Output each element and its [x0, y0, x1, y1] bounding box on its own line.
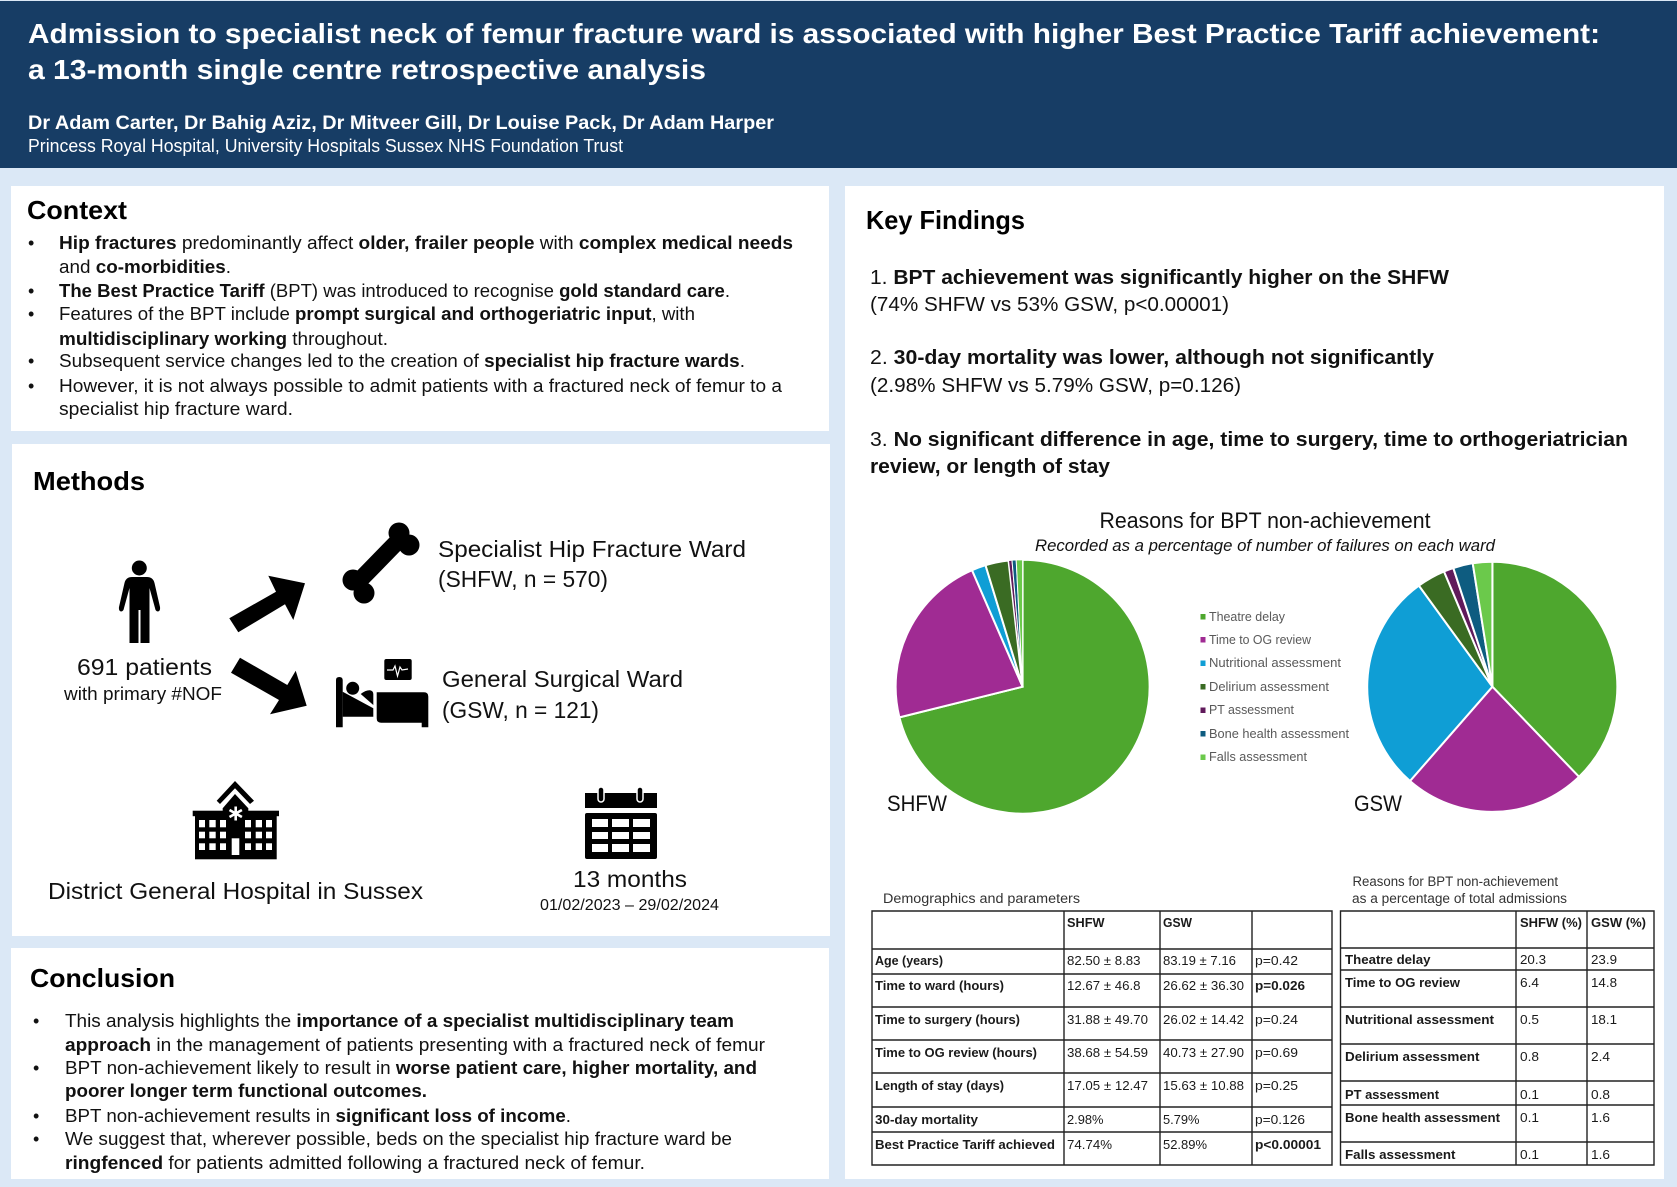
- finding 3: [870, 429, 1628, 478]
- table caption: demographics: Demographics and parameters: [883, 891, 1080, 906]
- context bullet list: However, it is not always possible to admit patients with a fractured neck of femur to a: [59, 376, 783, 396]
- table: demographics and parameters: 17.05 ± 12.47: [1067, 1078, 1148, 1093]
- table: demographics and parameters: p=0.126: [1255, 1112, 1305, 1127]
- text: patient count: 691 patients: [77, 654, 212, 680]
- table: reasons as percentage of admissions: 14.8: [1591, 975, 1617, 990]
- table: demographics and parameters: 52.89%: [1163, 1137, 1207, 1152]
- table: reasons as percentage of admissions: 18.1: [1591, 1012, 1617, 1027]
- conclusion bullet list: BPT non-achievement results in significant loss of income .: [65, 1106, 571, 1126]
- chart title: [1035, 508, 1496, 555]
- table: demographics and parameters: 30-day mortality: [875, 1112, 979, 1127]
- conclusion bullet list: •: [33, 1129, 39, 1149]
- table caption: reasons: as a percentage of total admissions: [1352, 891, 1567, 906]
- conclusion bullet list: BPT non-achievement likely to result in worse patient care, higher mortality, and: [65, 1058, 757, 1078]
- table: demographics and parameters: p<0.00001: [1255, 1137, 1321, 1152]
- panel: context: [11, 186, 829, 431]
- table: reasons as percentage of admissions: 6.4: [1520, 975, 1539, 990]
- text: study period: [540, 866, 719, 914]
- table: demographics and parameters: Length of stay (days): [875, 1078, 1004, 1093]
- table: reasons as percentage of admissions: Time to OG review: [1345, 975, 1461, 990]
- table: demographics and parameters: [872, 911, 1332, 1165]
- context bullet list: •: [28, 233, 34, 253]
- icon: calendar: [585, 787, 657, 859]
- table: demographics and parameters: 26.62 ± 36.30: [1163, 978, 1244, 993]
- pie chart: GSW: [1354, 562, 1617, 816]
- table: demographics and parameters: 5.79%: [1163, 1112, 1200, 1127]
- text: general ward: General Surgical Ward: [442, 666, 683, 692]
- table: reasons as percentage of admissions: Falls assessment: [1345, 1147, 1456, 1162]
- table: demographics and parameters: p=0.69: [1255, 1045, 1298, 1060]
- finding 2: [870, 347, 1435, 397]
- text: patient count: with primary #NOF: [63, 684, 222, 704]
- text: hospital: District General Hospital in Sussex: [48, 878, 424, 904]
- icon: hospital bed with monitor: [336, 659, 428, 727]
- context bullet list: •: [28, 304, 34, 324]
- table: reasons as percentage of admissions: [1340, 911, 1654, 1165]
- table: reasons as percentage of admissions: PT assessment: [1345, 1087, 1440, 1102]
- table: demographics and parameters: 82.50 ± 8.83: [1067, 953, 1140, 968]
- table: reasons as percentage of admissions: 0.1: [1520, 1087, 1539, 1102]
- table: demographics and parameters: p=0.026: [1255, 978, 1305, 993]
- legend: Time to OG review: [1209, 633, 1312, 647]
- table: reasons as percentage of admissions: GSW (%): [1591, 915, 1646, 930]
- table: reasons as percentage of admissions: 23.9: [1591, 952, 1617, 967]
- legend: Bone health assessment: [1209, 727, 1350, 741]
- table: reasons as percentage of admissions: 1.6: [1591, 1147, 1610, 1162]
- conclusion bullet list: We suggest that, wherever possible, beds on the specialist hip fracture ward be: [65, 1129, 732, 1149]
- legend: Delirium assessment: [1209, 680, 1330, 694]
- conclusion bullet list: •: [33, 1058, 39, 1078]
- context bullet list: Hip fractures predominantly affect older, frailer people with complex medical needs: [59, 233, 793, 253]
- finding 1: 1. BPT achievement was significantly higher on the SHFW: [870, 267, 1449, 289]
- table: reasons as percentage of admissions: 0.8: [1591, 1087, 1610, 1102]
- table: reasons as percentage of admissions: Bone health assessment: [1345, 1110, 1501, 1125]
- table caption: reasons: [1352, 874, 1567, 906]
- title: [28, 18, 1600, 85]
- context bullet list: The Best Practice Tariff (BPT) was introduced to recognise gold standard care .: [59, 281, 730, 301]
- icon: bone: [342, 522, 420, 604]
- icon: person: [119, 560, 160, 643]
- table: demographics and parameters: Time to surgery (hours): [875, 1012, 1020, 1027]
- text: general ward: [442, 666, 683, 723]
- pie chart: SHFW: [887, 560, 1150, 816]
- heading: key findings: Key Findings: [866, 205, 1025, 235]
- label: SHFW: SHFW: [887, 791, 947, 816]
- arrow: to general ward: [231, 658, 307, 714]
- legend: Nutritional assessment: [1209, 656, 1342, 670]
- title: a 13-month single centre retrospective analysis: [28, 54, 706, 85]
- table: demographics and parameters: Time to OG review (hours): [875, 1045, 1037, 1060]
- authors: Dr Adam Carter, Dr Bahig Aziz, Dr Mitveer Gill, Dr Louise Pack, Dr Adam Harper: [28, 113, 775, 134]
- panel: key findings: [845, 186, 1664, 1179]
- table: demographics and parameters: p=0.24: [1255, 1012, 1298, 1027]
- table: demographics and parameters: p=0.25: [1255, 1078, 1298, 1093]
- context bullet list: multidisciplinary working throughout.: [59, 329, 388, 349]
- table: reasons as percentage of admissions: 0.1: [1520, 1110, 1539, 1125]
- legend: Theatre delay: [1209, 610, 1286, 624]
- conclusion bullet list: approach in the management of patients presenting with a fractured neck of femur: [65, 1035, 765, 1055]
- table: demographics and parameters: 83.19 ± 7.16: [1163, 953, 1236, 968]
- conclusion bullet list: This analysis highlights the importance of a specialist multidisciplinary team: [65, 1011, 734, 1031]
- table: reasons as percentage of admissions: Nutritional assessment: [1345, 1012, 1495, 1027]
- title: Admission to specialist neck of femur fracture ward is associated with higher Best Practice Tariff achievement:: [28, 18, 1600, 49]
- context bullet list: [28, 233, 793, 419]
- conclusion bullet list: poorer longer term functional outcomes.: [65, 1081, 427, 1101]
- finding 3: review, or length of stay: [870, 456, 1111, 478]
- table: reasons as percentage of admissions: 0.8: [1520, 1049, 1539, 1064]
- table: demographics and parameters: GSW: [1163, 915, 1193, 930]
- table: demographics and parameters: p=0.42: [1255, 953, 1298, 968]
- table: demographics and parameters: Age (years): [875, 953, 943, 968]
- table: demographics and parameters: Best Practice Tariff achieved: [875, 1137, 1055, 1152]
- text: general ward: (GSW, n = 121): [442, 697, 599, 723]
- header banner: [0, 1, 1677, 168]
- heading: methods: Methods: [33, 466, 145, 496]
- chart title: Reasons for BPT non-achievement: [1100, 508, 1430, 533]
- legend: PT assessment: [1209, 703, 1295, 717]
- heading: conclusion: Conclusion: [30, 963, 175, 993]
- finding 1: [870, 267, 1449, 316]
- table: demographics and parameters: 26.02 ± 14.42: [1163, 1012, 1244, 1027]
- context bullet list: Features of the BPT include prompt surgical and orthogeriatric input , with: [59, 304, 695, 324]
- table: reasons as percentage of admissions: 0.1: [1520, 1147, 1539, 1162]
- conclusion bullet list: •: [33, 1011, 39, 1031]
- table: demographics and parameters: 31.88 ± 49.70: [1067, 1012, 1148, 1027]
- table: reasons as percentage of admissions: Theatre delay: [1345, 952, 1431, 967]
- context bullet list: •: [28, 376, 34, 396]
- panel: conclusion: [11, 948, 829, 1179]
- table: reasons as percentage of admissions: 2.4: [1591, 1049, 1610, 1064]
- context bullet list: specialist hip fracture ward.: [59, 399, 293, 419]
- context bullet list: •: [28, 351, 34, 371]
- text: study period: 13 months: [573, 866, 687, 892]
- context bullet list: •: [28, 281, 34, 301]
- table: demographics and parameters: 40.73 ± 27.90: [1163, 1045, 1244, 1060]
- text: specialist ward: (SHFW, n = 570): [438, 566, 608, 592]
- table: demographics and parameters: Time to ward (hours): [875, 978, 1004, 993]
- finding 3: 3. No significant difference in age, time to surgery, time to orthogeriatrician: [870, 429, 1628, 451]
- table: demographics and parameters: 74.74%: [1067, 1137, 1112, 1152]
- text: specialist ward: [438, 536, 746, 592]
- icon: hospital building: [193, 781, 279, 859]
- chart title: Recorded as a percentage of number of failures on each ward: [1035, 536, 1496, 555]
- context bullet list: Subsequent service changes led to the creation of specialist hip fracture wards .: [59, 351, 745, 371]
- table: reasons as percentage of admissions: 20.3: [1520, 952, 1546, 967]
- conclusion bullet list: ringfenced for patients admitted following a fractured neck of femur.: [65, 1153, 645, 1173]
- text: patient count: [63, 654, 222, 704]
- legend: Falls assessment: [1209, 750, 1308, 764]
- conclusion bullet list: [33, 1011, 765, 1173]
- table caption: reasons: Reasons for BPT non-achievement: [1352, 874, 1558, 889]
- text: study period: 01/02/2023 – 29/02/2024: [540, 897, 719, 914]
- table: demographics and parameters: 15.63 ± 10.88: [1163, 1078, 1244, 1093]
- conclusion bullet list: •: [33, 1106, 39, 1126]
- affiliation: Princess Royal Hospital, University Hospitals Sussex NHS Foundation Trust: [28, 136, 623, 156]
- text: specialist ward: Specialist Hip Fracture Ward: [438, 536, 746, 562]
- label: GSW: GSW: [1354, 791, 1402, 816]
- finding 1: (74% SHFW vs 53% GSW, p<0.00001): [870, 294, 1229, 316]
- context bullet list: and co-morbidities .: [59, 257, 231, 277]
- table: demographics and parameters: SHFW: [1067, 915, 1105, 930]
- legend: [1200, 610, 1350, 764]
- table: demographics and parameters: 38.68 ± 54.59: [1067, 1045, 1148, 1060]
- finding 2: (2.98% SHFW vs 5.79% GSW, p=0.126): [870, 375, 1241, 397]
- table: reasons as percentage of admissions: SHFW (%): [1520, 915, 1582, 930]
- finding 2: 2. 30-day mortality was lower, although not significantly: [870, 347, 1435, 369]
- table: demographics and parameters: 12.67 ± 46.8: [1067, 978, 1140, 993]
- arrow: to specialist ward: [229, 576, 305, 632]
- table: demographics and parameters: 2.98%: [1067, 1112, 1104, 1127]
- panel: methods: [12, 444, 830, 936]
- table: reasons as percentage of admissions: 1.6: [1591, 1110, 1610, 1125]
- heading: context: Context: [27, 195, 127, 225]
- table: reasons as percentage of admissions: Delirium assessment: [1345, 1049, 1480, 1064]
- table: reasons as percentage of admissions: 0.5: [1520, 1012, 1539, 1027]
